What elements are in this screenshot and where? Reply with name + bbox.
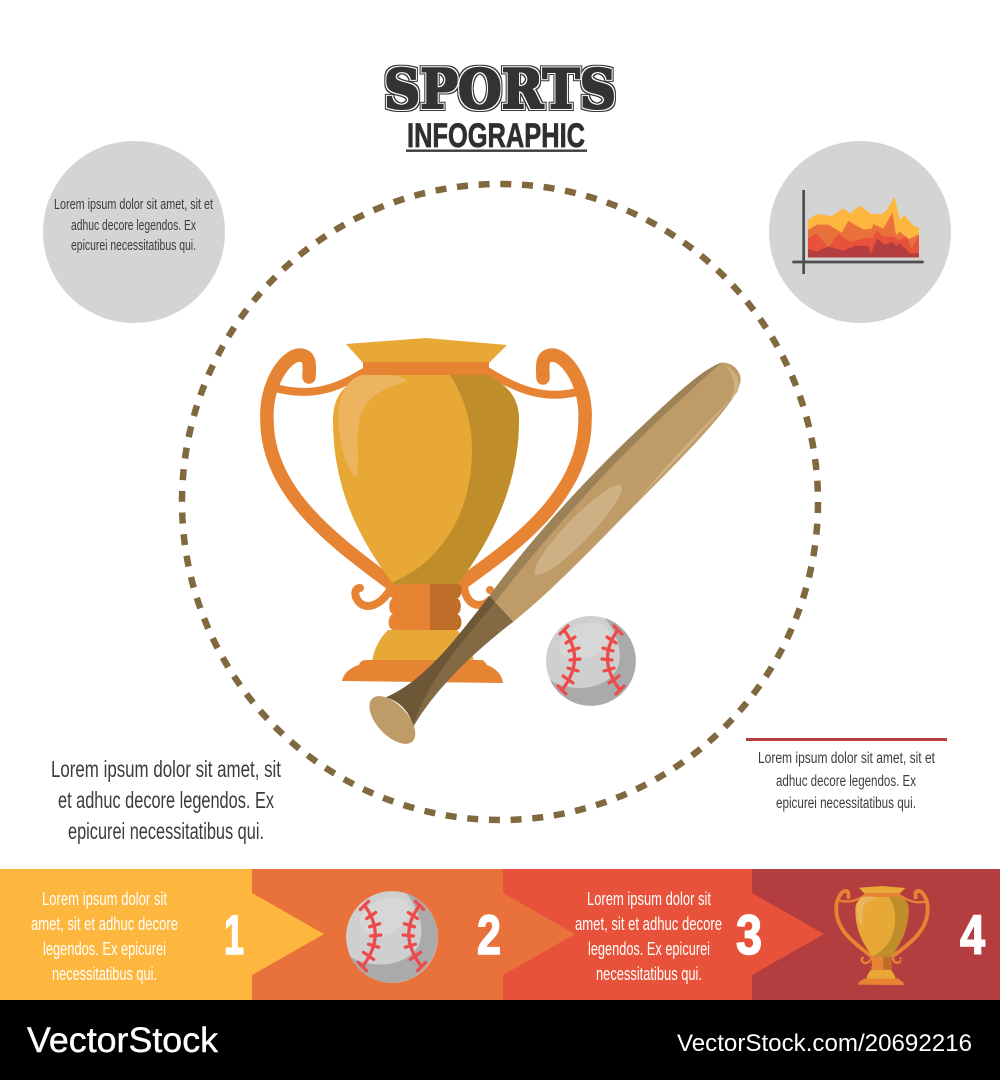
heading: INFOGRAPHIC: INFOGRAPHIC xyxy=(407,117,585,155)
text block: step 3: legendos. Ex epicurei xyxy=(588,938,710,959)
text block: step 1 xyxy=(31,888,178,984)
bat barrel highlights xyxy=(527,365,739,583)
arrow: step 2 to 3 xyxy=(503,893,575,975)
text block: step 1: amet, sit et adhuc decore xyxy=(31,913,178,934)
text block: step 1: Lorem ipsum dolor sit xyxy=(42,888,167,909)
dashed circle xyxy=(182,184,818,820)
area chart xyxy=(792,190,924,274)
panel: top right chart circle xyxy=(769,141,951,323)
text block: step 3: Lorem ipsum dolor sit xyxy=(587,888,711,909)
step 2 panel xyxy=(252,869,504,1000)
step 4 panel xyxy=(752,869,1000,1000)
text block: step 1: necessitatibus qui. xyxy=(52,963,157,984)
trophy base xyxy=(342,660,503,683)
trophy neck xyxy=(388,584,462,630)
panel: top left text circle xyxy=(43,141,225,323)
trophy band xyxy=(363,362,489,375)
watermark bar xyxy=(0,1000,1000,1080)
icon: trophy xyxy=(267,338,585,683)
text block: step 3 xyxy=(575,888,722,984)
trophy cup xyxy=(333,375,519,584)
icon: baseball bat xyxy=(361,363,741,752)
icon: baseball step 2 xyxy=(346,891,438,983)
text block: bottom right with red rule xyxy=(746,738,947,812)
text block: bottom right with red rule: Lorem ipsum dolor sit amet, sit et xyxy=(758,750,936,767)
trophy handles xyxy=(267,355,585,606)
arrow: step 3 to 4 xyxy=(752,893,824,975)
step 3 panel xyxy=(503,869,753,1000)
text block: bottom left: Lorem ipsum dolor sit amet, sit xyxy=(51,756,281,782)
bat barrel top edge xyxy=(489,363,722,602)
text block: bottom left: et adhuc decore legendos. Ex xyxy=(58,787,274,813)
bat knob xyxy=(361,688,424,752)
step 1 panel xyxy=(0,869,253,1000)
icon: baseball xyxy=(546,615,636,706)
trophy foot xyxy=(372,630,474,662)
trophy lid xyxy=(346,338,507,363)
text block: top left circle: adhuc decore legendos. Ex xyxy=(71,217,196,234)
watermark logo: VectorStock xyxy=(27,1021,219,1060)
arrow: step 1 to 2 xyxy=(252,893,324,975)
text block: top left circle: epicurei necessitatibus qui. xyxy=(71,237,196,254)
text block: step 3: necessitatibus qui. xyxy=(596,963,702,984)
number 2: 2 xyxy=(477,903,501,966)
heading underline xyxy=(406,150,587,152)
number 3: 3 xyxy=(736,903,762,966)
trophy cup highlight xyxy=(338,374,407,477)
trophy cup shadow xyxy=(393,375,519,584)
panel: step band xyxy=(0,869,1000,1000)
text block: step 3: amet, sit et adhuc decore xyxy=(575,913,722,934)
text block: bottom left xyxy=(51,756,281,844)
text block: bottom right with red rule: epicurei necessitatibus qui. xyxy=(776,795,916,812)
title xyxy=(384,57,616,155)
text block: step 1: legendos. Ex epicurei xyxy=(43,938,166,959)
icon: trophy step 4 xyxy=(836,886,928,985)
text block: bottom left: epicurei necessitatibus qui. xyxy=(68,818,264,844)
heading: SPORTS: SPORTS xyxy=(384,57,616,121)
text block: bottom right with red rule: adhuc decore legendos. Ex xyxy=(776,773,916,790)
number 1: 1 xyxy=(224,903,244,966)
bat barrel xyxy=(489,363,741,622)
number 4: 4 xyxy=(960,903,985,966)
bat handle xyxy=(386,596,513,727)
text block: top left circle xyxy=(54,196,214,254)
text block: top left circle: Lorem ipsum dolor sit amet, sit et xyxy=(54,196,214,213)
watermark url: VectorStock.com/20692216 xyxy=(677,1030,972,1057)
bat handle shadow xyxy=(386,596,495,727)
